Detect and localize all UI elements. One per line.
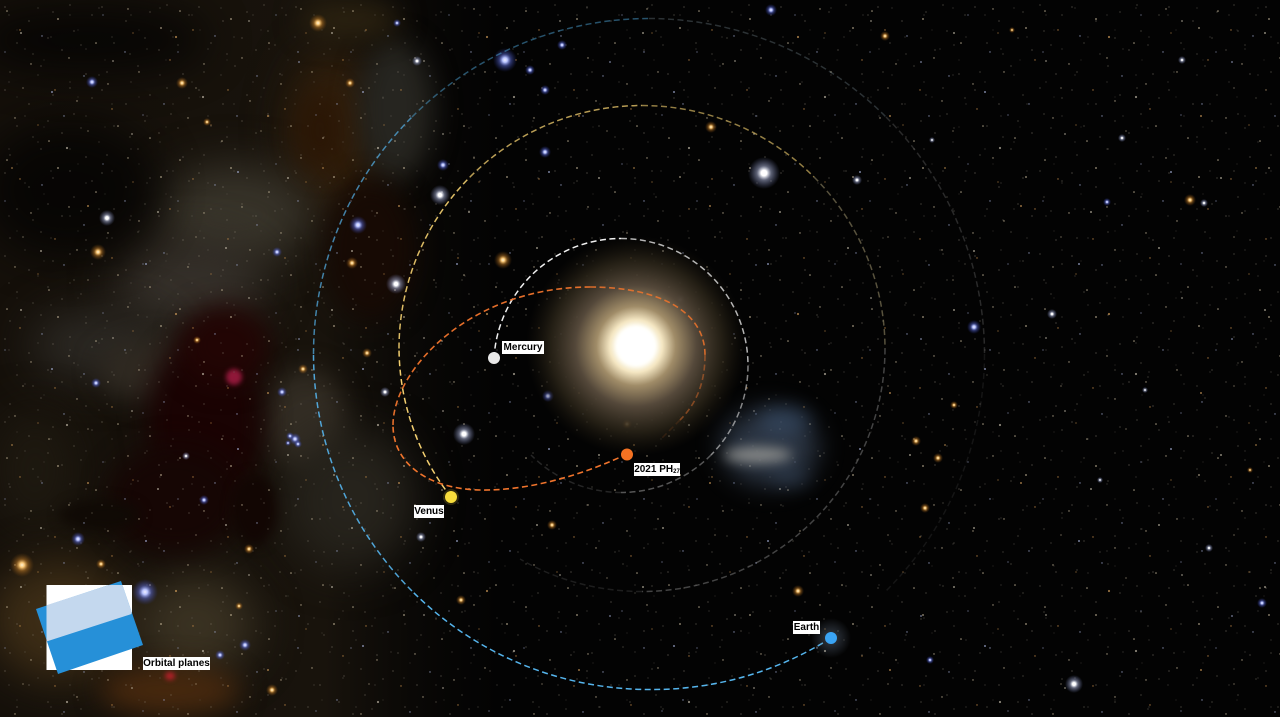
sun	[526, 236, 746, 456]
icon: orbital planes	[36, 581, 143, 674]
milky way: dark red nebula	[60, 305, 277, 680]
label: 2021 PH27: 2021 PH27	[634, 464, 680, 475]
asteroid: 2021 PH27	[621, 448, 633, 460]
orbit: Earth	[314, 18, 984, 690]
orbit: Venus	[399, 106, 885, 592]
label: Mercury: Mercury	[504, 342, 542, 353]
orbit: Mercury	[494, 238, 748, 492]
orbit: 2021 PH27	[393, 287, 705, 490]
label: Orbital planes: Orbital planes	[143, 658, 210, 669]
label: Venus: Venus	[414, 506, 444, 517]
label: Earth: Earth	[794, 622, 819, 633]
planet: Venus	[443, 489, 459, 505]
milky way: warm and grey clouds	[0, 0, 500, 717]
planet: Earth	[811, 618, 851, 658]
planet: Mercury	[488, 352, 500, 364]
large magellanic cloud	[722, 407, 818, 486]
